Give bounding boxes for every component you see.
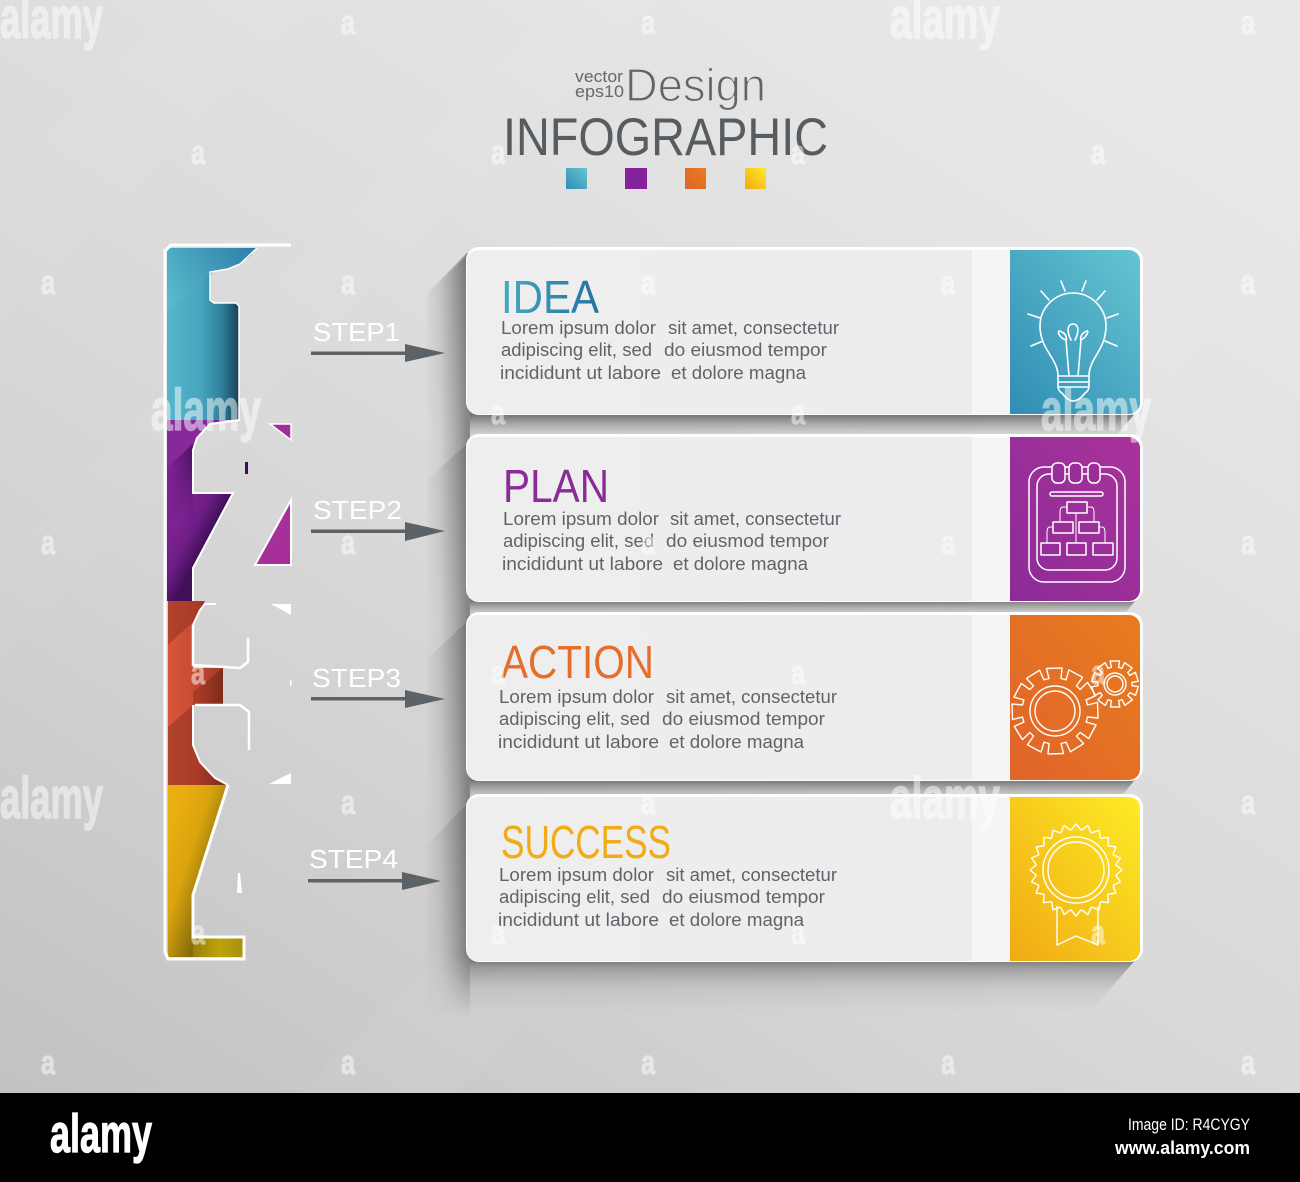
icon: award rosette [1030,824,1122,945]
number strip cut-out [165,245,292,959]
digit 3 band [168,601,292,785]
watermark overlay: alamy [0,766,103,831]
footer bar [0,1093,1300,1182]
body text: incididunt ut labore [502,554,663,574]
step 2 label and arrow: STEP2 [313,495,402,525]
card body [466,434,1143,602]
body text: do eiusmod tempor [662,887,825,907]
watermark overlay: a [791,134,806,172]
step 4 label and arrow [308,844,441,890]
body text: do eiusmod tempor [666,531,829,551]
body text: incididunt ut labore [500,363,661,383]
watermark overlay: a [941,1044,956,1082]
small gear [1091,661,1139,707]
watermark overlay: a [641,4,656,42]
watermark overlay: a [341,264,356,302]
body text: Lorem ipsum dolor [499,687,654,707]
vector eps10 label: vector [575,67,623,86]
body text: et dolore magna [673,554,809,574]
heading: Design: Design [625,59,766,111]
watermark overlay: a [191,654,206,692]
colour tab [1010,615,1140,780]
watermark overlay: a [641,264,656,302]
body text: adipiscing elit, sed [499,709,650,729]
watermark overlay: alamy [890,766,1000,831]
watermark overlay: a [341,784,356,822]
watermark overlay: a [791,654,806,692]
watermark overlay: a [641,524,656,562]
panel: PLAN [466,434,1143,602]
watermark overlay: a [41,264,56,302]
body text: Lorem ipsum dolor [499,865,654,885]
icon: gears [1012,661,1139,754]
watermark overlay: a [791,914,806,952]
digit 1 band [167,248,257,420]
digit 4 band [168,785,243,957]
body text: Lorem ipsum dolor [503,509,659,529]
watermark overlay: a [1241,264,1256,302]
step 1 label and arrow [311,317,445,362]
watermark overlay: a [341,1044,356,1082]
body text: adipiscing elit, sed [499,887,650,907]
watermark overlay: a [491,394,506,432]
step 4 label and arrow: STEP4 [309,844,398,874]
watermark overlay: a [191,914,206,952]
watermark overlay: alamy [1041,378,1151,443]
heading: IDEA [501,271,599,323]
watermark overlay: a [641,1044,656,1082]
body text: adipiscing elit, sed [501,340,652,360]
watermark overlay: a [491,914,506,952]
watermark overlay: a [191,134,206,172]
website: www.alamy.com [1114,1138,1250,1158]
image id: Image ID: R4CYGY [1128,1115,1250,1134]
watermark overlay: a [41,1044,56,1082]
watermark overlay: a [491,654,506,692]
body text: sit amet, consectetur [666,687,837,707]
body text: incididunt ut labore [498,732,659,752]
watermark overlay: a [941,264,956,302]
body text: et dolore magna [669,910,805,930]
watermark overlay: a [641,784,656,822]
body text: do eiusmod tempor [662,709,825,729]
body text: incididunt ut labore [498,910,659,930]
white cut-out outline [165,245,291,959]
heading: ACTION [501,636,654,688]
body text [498,865,837,930]
colour squares [566,168,766,189]
watermark overlay: a [341,524,356,562]
body text: et dolore magna [669,732,805,752]
alamy logo: alamy [50,1104,152,1164]
watermark overlay: alamy [151,378,261,443]
title block [503,59,828,189]
watermark overlay: a [1241,524,1256,562]
icon: planner with org chart [1029,463,1125,582]
heading: PLAN [503,460,609,512]
card body [466,247,1143,415]
card shadows [425,253,1138,1015]
colour tab [1010,250,1140,414]
body text: sit amet, consectetur [666,865,837,885]
body text [502,509,841,574]
watermark overlay: a [791,394,806,432]
panel: SUCCESS [466,794,1143,962]
panel: IDEA [466,247,1143,415]
body text [498,687,837,752]
body text [500,318,839,383]
colour tab [1010,437,1140,601]
body text: sit amet, consectetur [670,509,841,529]
heading: INFOGRAPHIC: INFOGRAPHIC [503,108,828,167]
body text: Lorem ipsum dolor [501,318,656,338]
watermark overlay: a [1091,914,1106,952]
heading: SUCCESS [501,816,671,868]
step 2 label and arrow [311,495,445,541]
big gear [1012,668,1098,754]
watermark overlay: a [41,524,56,562]
vector eps10 label [575,67,624,101]
watermark overlay: a [341,4,356,42]
card body [466,612,1143,781]
watermark overlay: a [1241,4,1256,42]
watermark overlay: a [491,134,506,172]
watermark overlay: a [1091,134,1106,172]
body text: do eiusmod tempor [664,340,827,360]
body text: sit amet, consectetur [668,318,839,338]
step 1 label and arrow: STEP1 [313,317,400,347]
body text: et dolore magna [671,363,807,383]
watermark overlay: a [1091,654,1106,692]
colour tab [1010,797,1140,961]
watermark overlay: a [941,524,956,562]
step 3 label and arrow: STEP3 [312,663,401,693]
watermark overlay: a [1241,784,1256,822]
body text: adipiscing elit, sed [503,531,654,551]
digit 2 band [167,420,291,601]
vector eps10 label: eps10 [575,82,624,101]
card body [466,794,1143,962]
watermark overlay: a [1241,1044,1256,1082]
icon: light bulb [1028,281,1118,401]
step 3 label and arrow [311,663,445,708]
panel: ACTION [466,612,1143,781]
